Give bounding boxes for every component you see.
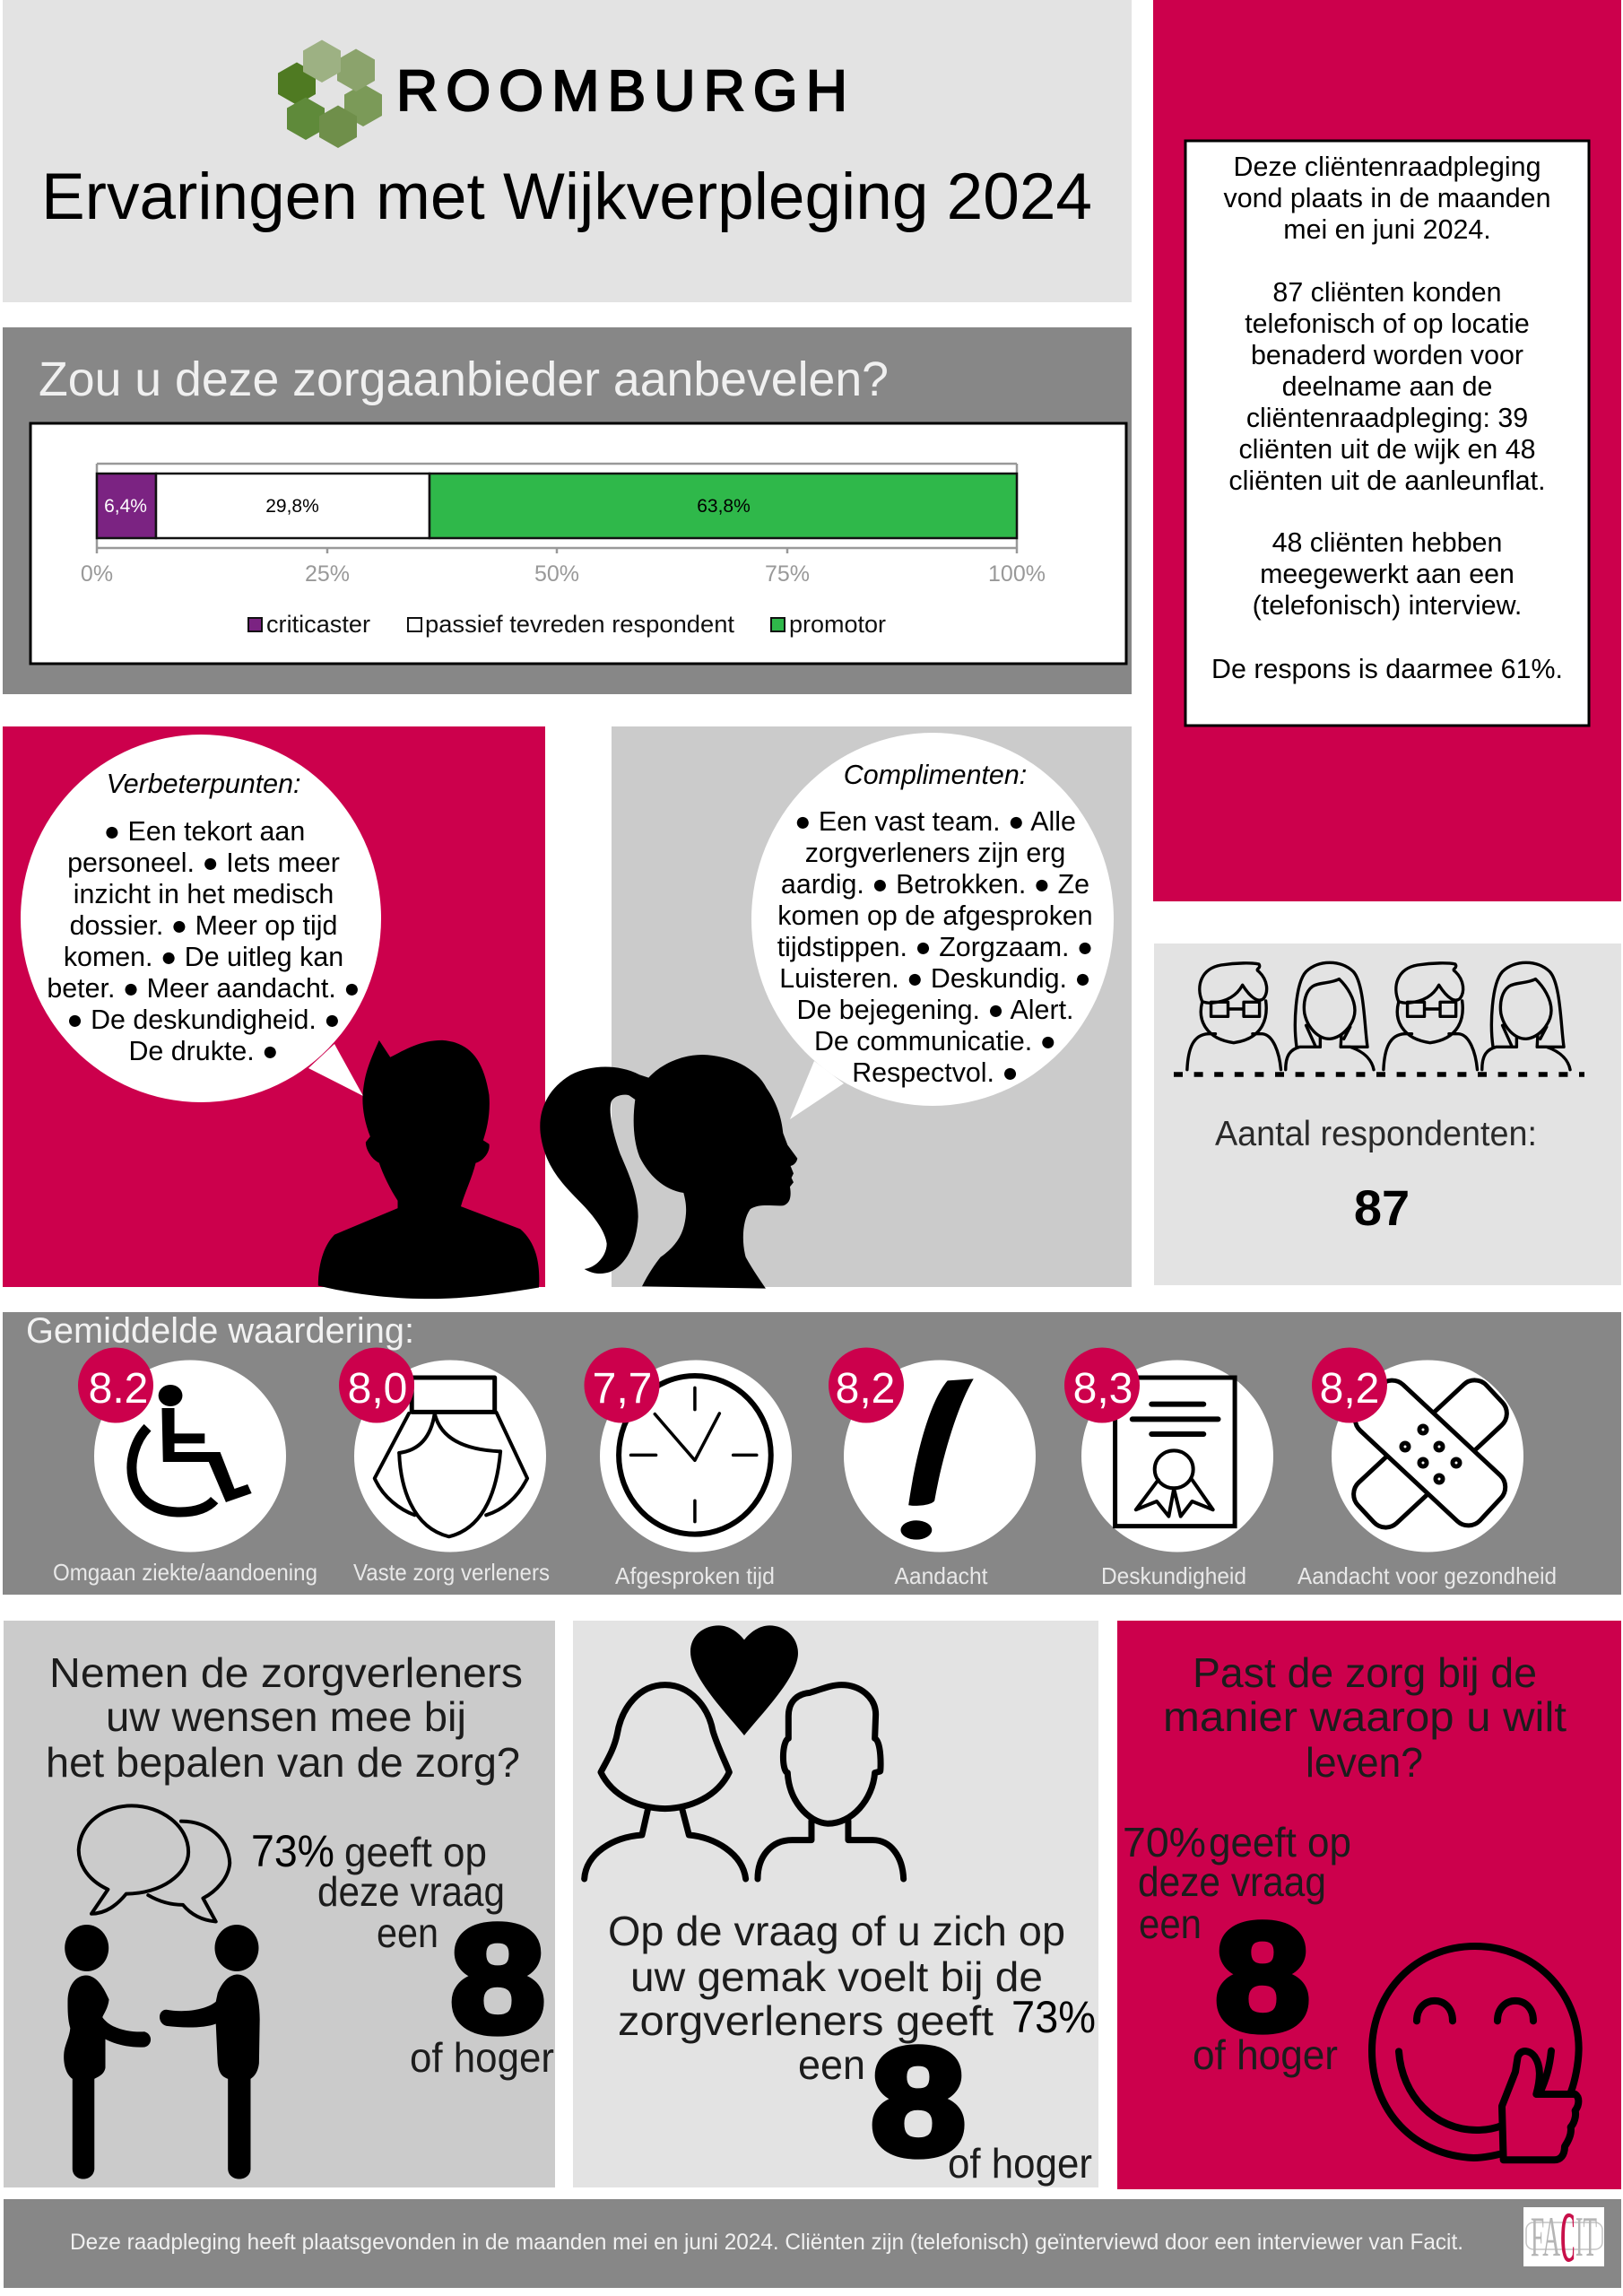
heading: past de zorg: Past de zorg bij de: [1193, 1649, 1537, 1696]
rating: omgaan ziekte: [53, 1347, 317, 1586]
text: gemak vraag: Op de vraag of u zich op: [608, 1908, 1065, 1954]
text: 70 procent: 8: [1215, 1892, 1310, 2063]
speech bubble: complimenten: Respectvol. ●: [852, 1057, 1019, 1088]
text: toelichting: benaderd worden voor: [1251, 340, 1523, 370]
text: gemak vraag: zorgverleners geeft: [618, 1997, 994, 2044]
text: toelichting: De respons is daarmee 61%.: [1211, 654, 1563, 684]
speech bubble: verbeterpunten: Verbeterpunten:: [107, 769, 300, 799]
text: gemak vraag: uw gemak voelt bij de: [630, 1953, 1043, 2000]
stacked bar chart: promotor: [789, 611, 886, 638]
rating: aandacht voor gezondheid: 8,2: [1320, 1365, 1379, 1413]
label: aantal respondenten: Aantal respondenten:: [1215, 1115, 1537, 1153]
panel: header: [3, 0, 1132, 302]
panel: aanbevelen chart: [3, 327, 1132, 694]
speech bubble: verbeterpunten: beter. ● Meer aandacht. ●: [47, 973, 360, 1004]
heading: gemiddelde waardering: Gemiddelde waardering:: [26, 1311, 414, 1351]
text: 73 procent: of hoger: [410, 2034, 554, 2081]
speech bubble: verbeterpunten: inzicht in het medisch: [74, 879, 334, 909]
text: gemak vraag: een: [798, 2041, 865, 2088]
text: 73 procent: [251, 1826, 554, 2081]
text: gemak vraag: 73%: [1011, 1992, 1096, 2042]
text: toelichting: mei en juni 2024.: [1283, 214, 1491, 245]
speech bubble: complimenten: De bejegening. ● Alert.: [797, 995, 1073, 1025]
rating: vaste zorgverleners: [339, 1347, 550, 1586]
rating: deskundigheid: [1064, 1347, 1273, 1589]
stacked bar chart: 63,8%: [697, 496, 751, 517]
rating: aandacht: [829, 1347, 1036, 1589]
text: 73 procent: 73%: [251, 1826, 334, 1876]
text: toelichting: deelname aan de: [1282, 371, 1492, 402]
panel: verbeterpunten: [3, 726, 545, 1287]
speech bubble: verbeterpunten: ● De deskundigheid. ●: [66, 1004, 341, 1035]
text: 70 procent: 70%: [1123, 1819, 1206, 1866]
text: gemak vraag: of hoger: [948, 2140, 1092, 2187]
heading: past de zorg: leven?: [1306, 1739, 1423, 1786]
rating: afgesproken tijd: [585, 1347, 792, 1589]
rating: aandacht: 8,2: [836, 1365, 895, 1413]
text: 73 procent: een: [377, 1909, 438, 1956]
icon: man silhouette: [318, 1040, 539, 1299]
rating: vaste zorgverleners: Vaste zorg verleners: [353, 1559, 550, 1586]
rating: omgaan ziekte: 8.2: [89, 1365, 148, 1413]
stacked bar chart: 75%: [765, 561, 810, 587]
logo: Roomburgh: [278, 39, 847, 148]
speech bubble: verbeterpunten: personeel. ● Iets meer: [67, 848, 340, 878]
heading: wensen: het bepalen van de zorg?: [46, 1739, 520, 1786]
speech bubble: verbeterpunten: [21, 735, 381, 1102]
text: 70 procent: [1123, 1819, 1351, 2078]
text: toelichting: Deze cliëntenraadpleging: [1234, 152, 1541, 182]
text: 70 procent: een: [1139, 1900, 1202, 1947]
text: 70 procent: of hoger: [1193, 2031, 1338, 2078]
text: 70 procent: deze vraag: [1138, 1858, 1326, 1905]
rating: omgaan ziekte: Omgaan ziekte/aandoening: [53, 1559, 317, 1586]
speech bubble: verbeterpunten: dossier. ● Meer op tijd: [70, 910, 337, 941]
speech bubble: verbeterpunten: De drukte. ●: [128, 1036, 279, 1066]
text: toelichting: [1211, 152, 1563, 684]
text: toelichting: vond plaats in de maanden: [1224, 183, 1550, 213]
panel: footer: [4, 2198, 1621, 2288]
icon: respondents: [1174, 962, 1584, 1074]
rating: vaste zorgverleners: 8,0: [348, 1365, 407, 1413]
speech bubble: complimenten: tijdstippen. ● Zorgzaam. ●: [777, 932, 1093, 962]
speech bubble: verbeterpunten: komen. ● De uitleg kan: [64, 942, 343, 972]
text: toelichting: 87 cliënten konden: [1272, 277, 1502, 308]
panel: aantal respondenten: [1154, 944, 1621, 1285]
logo: Facit: C: [1560, 2198, 1575, 2277]
panel: gemak: [573, 1621, 1098, 2187]
text: toelichting: meegewerkt aan een: [1260, 559, 1515, 589]
heading: past de zorg: [1163, 1649, 1567, 1786]
rating: aandacht voor gezondheid: [1298, 1347, 1557, 1589]
text: toelichting: 48 cliënten hebben: [1272, 527, 1502, 558]
speech bubble: complimenten: Complimenten:: [844, 760, 1027, 790]
text: toelichting: (telefonisch) interview.: [1253, 590, 1522, 621]
stacked bar chart: 50%: [534, 561, 579, 587]
logo: Facit: FA: [1531, 2205, 1560, 2268]
icon: couple with heart: [585, 1625, 904, 1879]
speech bubble: complimenten: [751, 733, 1114, 1119]
rating: aandacht: Aandacht: [895, 1562, 988, 1589]
rating: deskundigheid: 8,3: [1073, 1365, 1133, 1413]
speech bubble: complimenten: De communicatie. ●: [814, 1026, 1056, 1057]
heading: wensen: [46, 1649, 523, 1786]
speech bubble: complimenten: komen op de afgesproken: [777, 900, 1093, 931]
speech bubble: complimenten: aardig. ● Betrokken. ● Ze: [781, 869, 1089, 900]
stacked bar chart: 29,8%: [265, 496, 319, 517]
text: toelichting: cliëntenraadpleging: 39: [1246, 403, 1528, 433]
speech bubble: verbeterpunten: ● Een tekort aan: [104, 816, 305, 847]
stacked bar chart: passief tevreden respondent: [425, 611, 735, 638]
icon: smiley with thumb: [1372, 1946, 1579, 2160]
text: toelichting: cliënten uit de wijk en 48: [1238, 434, 1536, 465]
stacked bar chart: 25%: [305, 561, 350, 587]
text: gemak vraag: 8: [871, 2017, 966, 2187]
stacked bar chart: 0%: [81, 561, 113, 587]
text: gemak vraag: [608, 1908, 1096, 2187]
stacked bar chart: 100%: [988, 561, 1046, 587]
logo: Roomburgh: ROOMBURGH: [396, 58, 847, 123]
text: 70 procent: geeft op: [1209, 1819, 1351, 1866]
speech bubble: complimenten: ● Een vast team. ● Alle: [794, 806, 1076, 837]
speech bubble: complimenten: Luisteren. ● Deskundig. ●: [779, 963, 1091, 994]
number: 87: 87: [1354, 1179, 1410, 1236]
rating: deskundigheid: Deskundigheid: [1101, 1562, 1246, 1589]
text: 73 procent: deze vraag: [317, 1868, 505, 1915]
logo: Facit: [1523, 2198, 1604, 2277]
text: toelichting: telefonisch of op locatie: [1245, 309, 1530, 339]
heading: wensen: uw wensen mee bij: [106, 1693, 466, 1740]
heading: wensen: Nemen de zorgverleners: [49, 1649, 523, 1696]
text: footer note: Deze raadpleging heeft plaatsgevonden in de maanden mei en juni 2024. Cliënten zijn (telefonisch) geïnterviewd door een interviewer van Facit.: [70, 2230, 1463, 2255]
panel: past de zorg: [1117, 1621, 1621, 2189]
panel: gemiddelde waardering: [3, 1311, 1621, 1595]
speech bubble: complimenten: zorgverleners zijn erg: [805, 838, 1065, 868]
icon: woman silhouette: [540, 1055, 797, 1289]
rating: afgesproken tijd: 7,7: [593, 1365, 652, 1413]
panel: wensen: [4, 1621, 555, 2187]
heading: aanbevelen: Zou u deze zorgaanbieder aanbevelen?: [39, 352, 889, 406]
text: 73 procent: geeft op: [344, 1829, 487, 1875]
rating: aandacht voor gezondheid: Aandacht voor gezondheid: [1298, 1562, 1557, 1589]
panel: complimenten: [612, 726, 1132, 1287]
text: 73 procent: 8: [450, 1894, 545, 2065]
stacked bar chart: [30, 423, 1126, 664]
panel: toelichting: [1153, 0, 1621, 901]
rating: afgesproken tijd: Afgesproken tijd: [615, 1562, 775, 1589]
text: toelichting: cliënten uit de aanleunflat.: [1228, 465, 1546, 496]
heading: past de zorg: manier waarop u wilt: [1163, 1693, 1567, 1740]
icon: two people talking: [64, 1805, 260, 2179]
stacked bar chart: 6,4%: [104, 496, 147, 517]
title: Ervaringen met Wijkverpleging 2024: [41, 161, 1092, 233]
stacked bar chart: criticaster: [266, 611, 370, 638]
